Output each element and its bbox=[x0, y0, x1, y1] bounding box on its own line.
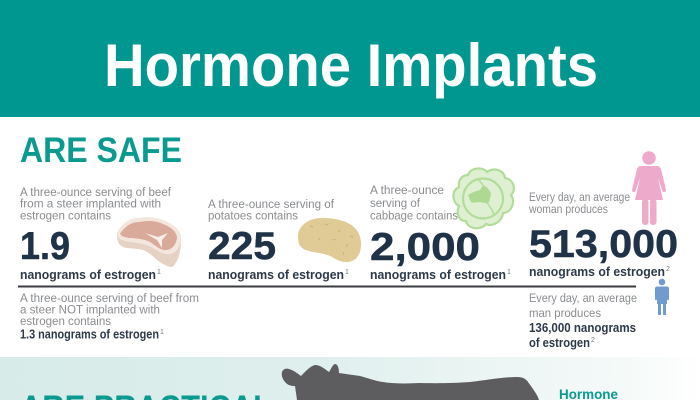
unit label: nanograms of estrogen bbox=[208, 268, 344, 282]
panel: implanted beef: from a steer implanted with bbox=[20, 196, 161, 210]
panel: cabbage: cabbage contains bbox=[370, 208, 458, 222]
divider line bbox=[18, 286, 636, 288]
panel: potatoes: 1 bbox=[345, 269, 349, 276]
panel: non-implanted beef: a steer NOT implanted with bbox=[20, 302, 160, 316]
unit label: nanograms of estrogen bbox=[529, 265, 665, 279]
icon: woman bbox=[632, 151, 666, 225]
heading: are safe: ARE SAFE bbox=[20, 131, 182, 170]
panel: potatoes bbox=[208, 197, 349, 282]
icon: cabbage bbox=[453, 168, 514, 228]
panel: non-implanted beef bbox=[20, 291, 199, 342]
panel: non-implanted beef: 1 bbox=[160, 329, 164, 336]
panel: man: 136,000 nanograms bbox=[529, 321, 636, 335]
panel: man: of estrogen bbox=[529, 336, 590, 350]
panel: man bbox=[529, 291, 637, 350]
panel: man: man produces bbox=[529, 306, 601, 320]
panel: non-implanted beef: estrogen contains bbox=[20, 314, 111, 328]
panel: potatoes: potatoes contains bbox=[208, 208, 298, 222]
panel: implanted beef: A three-ounce serving of beef bbox=[20, 185, 172, 199]
header banner bbox=[0, 0, 700, 117]
panel: woman bbox=[528, 190, 678, 279]
number: 225: 225 bbox=[208, 225, 276, 268]
panel: non-implanted beef: A three-ounce serving of beef from bbox=[20, 291, 199, 305]
panel: implanted beef bbox=[20, 185, 172, 282]
unit label: nanograms of estrogen bbox=[20, 268, 156, 282]
panel: are practical band bbox=[0, 357, 700, 400]
panel: cabbage: serving of bbox=[370, 196, 421, 210]
number: 2,000: 2,000 bbox=[370, 226, 480, 269]
number: 1.9: 1.9 bbox=[20, 225, 70, 268]
panel: man: 2 bbox=[591, 337, 595, 344]
panel: implanted beef: estrogen contains bbox=[20, 208, 111, 222]
panel: woman: Every day, an average bbox=[529, 190, 630, 204]
panel: non-implanted beef: 1.3 nanograms of estrogen bbox=[20, 328, 159, 342]
panel: cabbage: 1 bbox=[507, 269, 511, 276]
unit label: nanograms of estrogen bbox=[370, 268, 506, 282]
panel: cabbage bbox=[370, 183, 511, 282]
panel: man: Every day, an average bbox=[529, 291, 637, 305]
number: 513,000: 513,000 bbox=[529, 223, 678, 266]
panel: cabbage: A three-ounce bbox=[370, 183, 444, 197]
icon: man bbox=[655, 279, 669, 315]
panel: implanted beef: 1 bbox=[157, 269, 161, 276]
icon: cow silhouette bbox=[282, 364, 539, 400]
panel: woman: woman produces bbox=[528, 202, 608, 216]
icon: potato bbox=[298, 218, 361, 262]
icon: steak bbox=[117, 217, 181, 267]
panel: woman: 2 bbox=[666, 266, 670, 273]
title: Hormone Implants bbox=[104, 32, 598, 99]
panel: potatoes: A three-ounce serving of bbox=[208, 197, 335, 211]
